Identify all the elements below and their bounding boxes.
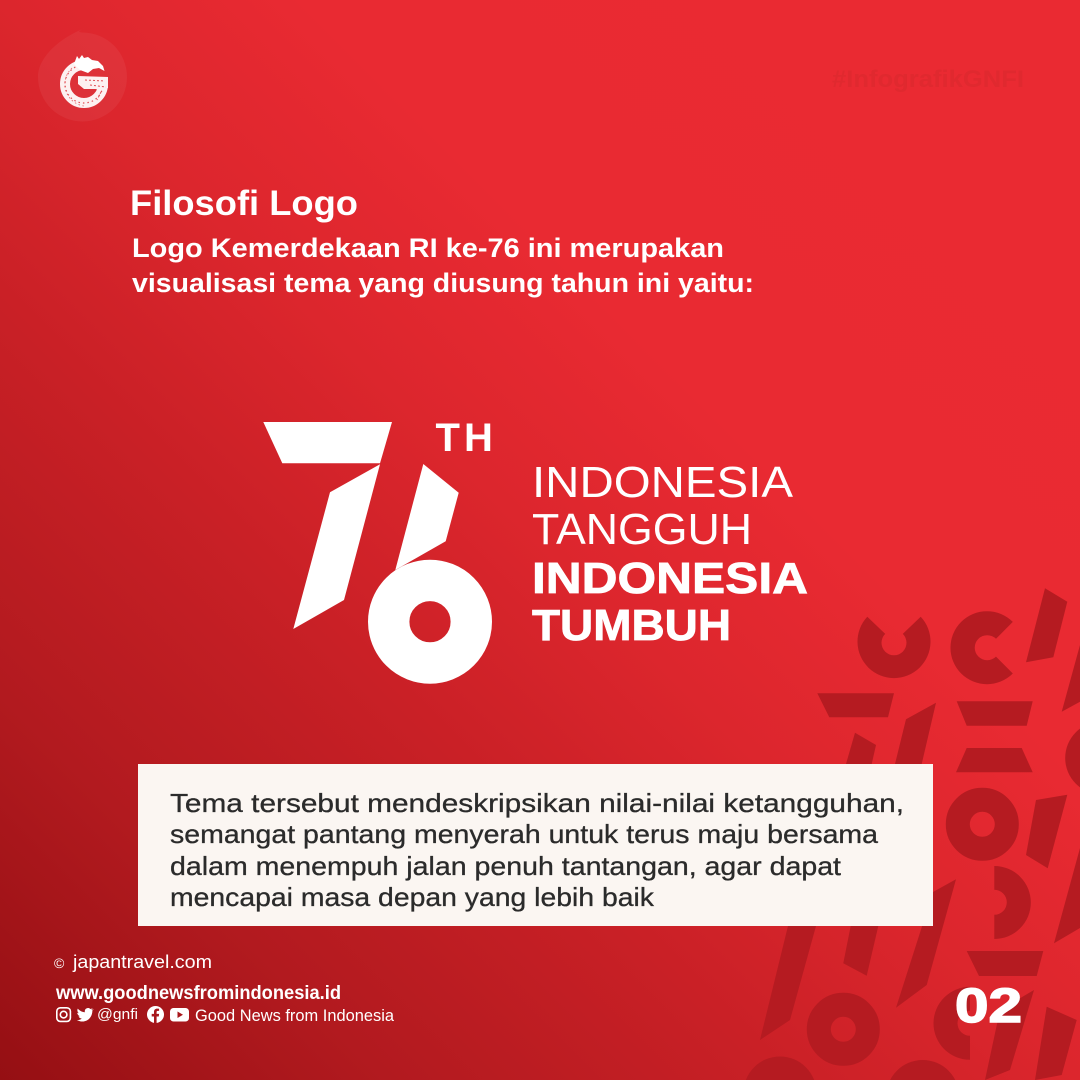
icon: youtube xyxy=(170,1008,189,1022)
numeral 6 xyxy=(389,464,471,663)
page name: Good News from Indonesia xyxy=(195,1006,395,1025)
page number: 02 xyxy=(955,980,1022,1033)
description panel xyxy=(138,764,933,926)
theme wordmark: TANGGUH xyxy=(532,505,752,554)
handle: @gnfi xyxy=(97,1006,138,1023)
image credit: japantravel.com xyxy=(72,952,212,972)
image credit: © xyxy=(54,955,65,971)
hashtag: #InfografikGNFI xyxy=(832,66,1024,93)
GNFI emblem xyxy=(38,26,127,122)
icon: facebook xyxy=(147,1006,164,1023)
description text: mencapai masa depan yang lebih baik xyxy=(170,882,655,912)
theme wordmark: TUMBUH xyxy=(532,601,731,650)
emblem garuda ring xyxy=(65,55,108,106)
description text: dalam menempuh jalan penuh tantangan, agar dapat xyxy=(170,851,842,881)
intro text: visualisasi tema yang diusung tahun ini yaitu: xyxy=(132,268,754,298)
description text xyxy=(170,788,904,912)
description text: semangat pantang menyerah untuk terus maju bersama xyxy=(170,819,879,849)
icon: twitter xyxy=(77,1008,94,1022)
intro text: Logo Kemerdekaan RI ke-76 ini merupakan xyxy=(132,233,724,263)
theme wordmark: INDONESIA xyxy=(532,458,794,507)
social media row xyxy=(57,1006,395,1025)
background pattern of logo shapes xyxy=(744,588,1080,1080)
TH suffix: TH xyxy=(436,416,493,460)
website: www.goodnewsfromindonesia.id xyxy=(55,983,341,1004)
theme wordmark: INDONESIA xyxy=(532,554,808,603)
heading: Filosofi Logo: Filosofi Logo xyxy=(130,184,358,223)
description text: Tema tersebut mendeskripsikan nilai-nilai ketangguhan, xyxy=(170,788,904,818)
emblem backdrop circle xyxy=(38,26,127,122)
theme wordmark xyxy=(532,458,808,650)
icon: instagram xyxy=(57,1008,70,1021)
intro text xyxy=(132,233,754,298)
76th anniversary logo xyxy=(263,416,493,663)
numeral 7 xyxy=(263,422,392,629)
